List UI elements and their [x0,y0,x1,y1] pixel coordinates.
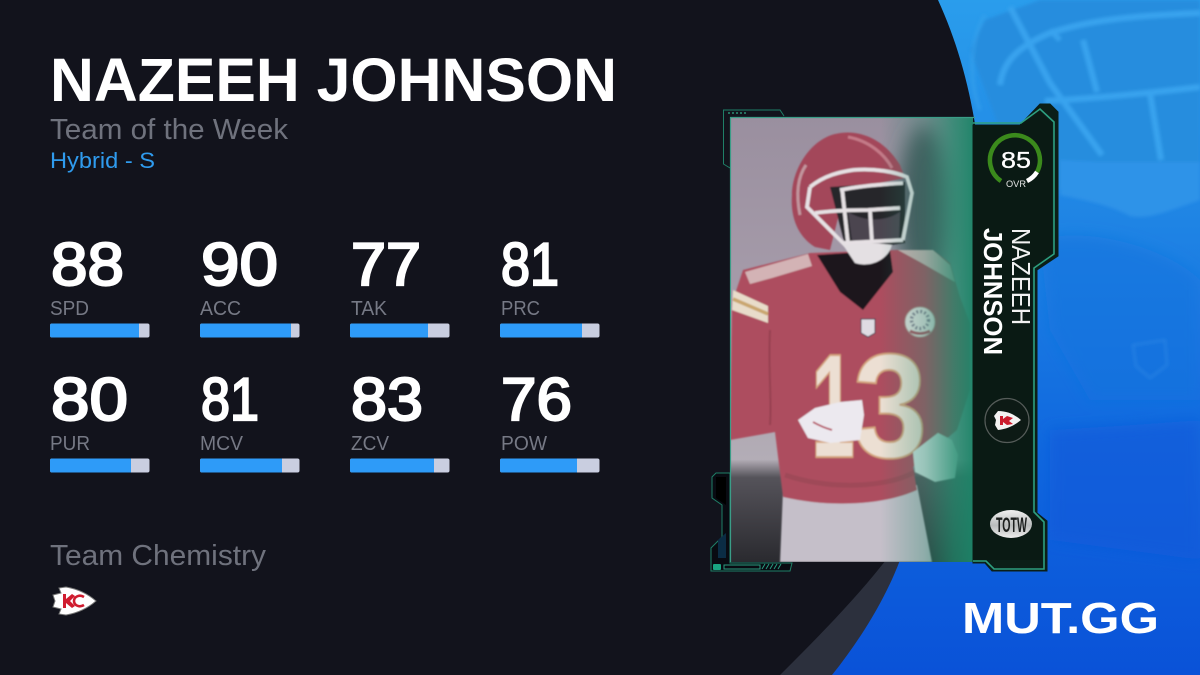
photo: center glove [798,400,864,443]
stat: speed: 88 [51,231,124,298]
frame: top-left tech bracket [724,110,784,168]
stat: zone coverage: ZCV [351,433,390,455]
photo: jersey number 1: 1 [811,324,855,489]
card: first name vertical: NAZEEH [1006,228,1036,325]
stat: tackle [350,231,450,338]
photo: helmet shell [792,132,905,250]
stat: man coverage: MCV [200,433,244,455]
card: player photo [730,117,973,562]
subtitle: program name: Team of the Week [50,114,288,146]
photo: NFL shield [861,319,875,337]
title: player name: NAZEEH JOHNSON [50,46,617,114]
frame: card top and left edge [730,118,975,562]
photo: collar [817,250,893,310]
photo: jersey number 3: 3 [853,324,927,489]
rating: overall ring: OVR [1006,179,1026,189]
heading: team chemistry: Team Chemistry [50,540,267,572]
logo: MUT.GG wordmark: MUT.GG [962,594,1159,643]
stat: tackle: 77 [351,231,421,298]
frame: bottom-left tech bracket [711,473,792,571]
photo: chin strap [843,243,892,264]
stat: play recognition [500,231,600,338]
stat: power moves: 76 [501,366,572,433]
stat: man coverage [200,366,300,472]
stat: speed: SPD [50,298,89,320]
rating: overall ring: 85 [1001,147,1031,173]
card: dark name panel [973,104,1058,571]
photo: jersey body and arms [730,250,970,504]
icon: team of the week oval [990,510,1032,538]
icon: Chiefs arrowhead logo [53,587,96,615]
photo: team patch [905,307,935,337]
stat: acceleration [200,231,300,338]
background: grey curved band [770,540,900,675]
stat: zone coverage: 83 [351,366,423,433]
photo: sleeve stripes [732,290,768,323]
stat: play recognition: PRC [501,298,540,320]
stat: zone coverage [350,366,450,472]
background: ghost helmet and player watermark [974,0,1200,480]
stat: acceleration: 90 [201,231,278,298]
photo: pants [780,485,932,562]
photo: right glove [913,433,958,482]
card: last name vertical: JOHNSON [978,228,1008,355]
photo: shoulder fabric highlights [745,250,955,284]
stat: power moves: POW [501,433,547,455]
photo: face [830,182,905,248]
stat: tackle: TAK [351,298,388,320]
stat: power moves [500,366,600,472]
stat: play recognition: 81 [501,231,559,298]
icon: team badge circle [985,398,1029,442]
card: player card [711,104,1058,571]
stat: acceleration: ACC [200,298,241,320]
stat: pursuit: PUR [50,433,90,455]
rating: overall ring [990,135,1040,189]
icon: team of the week oval: TOTW [996,514,1027,537]
stat: speed [50,231,150,338]
stat: man coverage: 81 [201,366,259,433]
stat: pursuit [50,366,150,472]
subtitle: archetype and position: Hybrid - S [50,148,155,173]
photo: facemask [807,169,912,247]
stat: pursuit: 80 [51,366,128,433]
